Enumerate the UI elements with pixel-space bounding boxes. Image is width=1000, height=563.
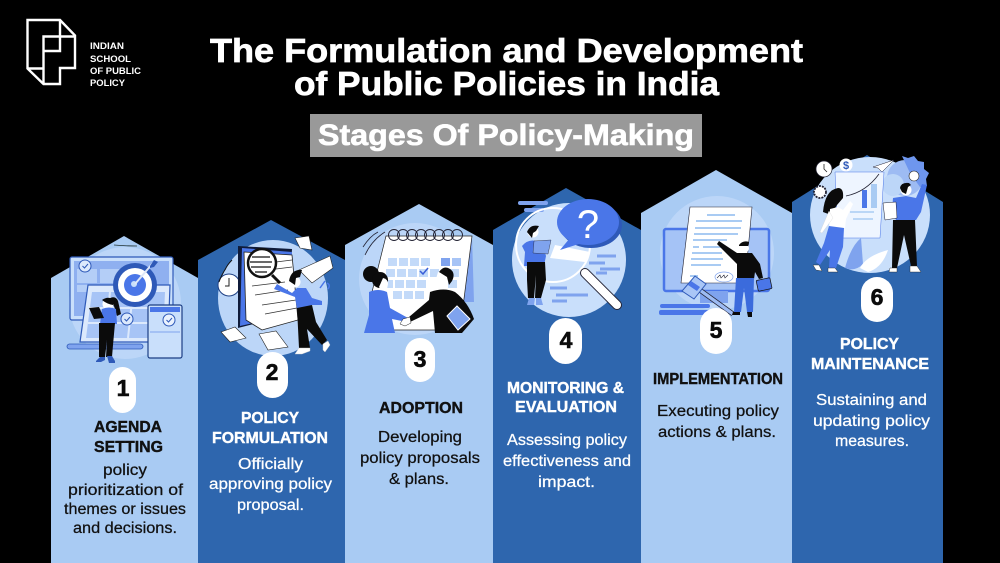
step badge 3 bbox=[405, 338, 435, 382]
subtitle banner bbox=[310, 114, 702, 157]
logo text: POLICY bbox=[90, 78, 126, 89]
description 4: Assessing policy bbox=[507, 432, 627, 449]
step badge 5: 5 bbox=[710, 317, 723, 343]
figure: woman bbox=[363, 266, 408, 333]
icon: calendar bbox=[370, 230, 472, 330]
description 2 bbox=[209, 456, 332, 514]
description 3: & plans. bbox=[389, 471, 449, 488]
step badge 5 bbox=[700, 308, 732, 354]
description 3: Developing bbox=[378, 429, 462, 446]
description 1: prioritization of bbox=[68, 482, 184, 499]
description 1: and decisions. bbox=[73, 520, 177, 537]
panel 3: adoption bbox=[345, 204, 493, 563]
figure: man bbox=[400, 268, 474, 333]
heading: policy formulation: FORMULATION bbox=[212, 430, 328, 447]
description 3: policy proposals bbox=[360, 450, 480, 467]
step badge 4 bbox=[549, 318, 582, 364]
description 5 bbox=[657, 403, 779, 441]
description 6: updating policy bbox=[813, 413, 930, 430]
panel 2: policy formulation bbox=[198, 220, 345, 563]
heading: implementation: IMPLEMENTATION bbox=[653, 371, 783, 388]
logo text bbox=[90, 41, 141, 89]
step badge 6 bbox=[861, 277, 893, 322]
panel 4: monitoring and evaluation bbox=[493, 188, 641, 563]
title: The Formulation and Development bbox=[210, 32, 803, 69]
description 1 bbox=[64, 462, 186, 537]
icon: logo mark bbox=[28, 20, 75, 84]
illustration: target and screens bbox=[67, 245, 182, 363]
figure: man bbox=[883, 183, 927, 272]
illustration: document under magnifier bbox=[218, 236, 333, 356]
description 6: measures. bbox=[835, 433, 909, 450]
title bbox=[210, 32, 803, 102]
heading: monitoring and evaluation bbox=[507, 380, 624, 416]
icon: question speech bubble: ? bbox=[577, 203, 599, 247]
heading: policy formulation: POLICY bbox=[241, 410, 299, 427]
chart card bbox=[835, 172, 888, 272]
figure: person holding magnifier bbox=[274, 270, 330, 354]
icon: magnifier bbox=[248, 249, 280, 283]
subtitle banner: Stages Of Policy-Making bbox=[318, 119, 694, 152]
description 2: approving policy bbox=[209, 476, 332, 493]
figure: businessman bbox=[717, 241, 772, 317]
description 2: proposal. bbox=[237, 497, 304, 514]
description 4 bbox=[503, 432, 631, 491]
heading: adoption: ADOPTION bbox=[379, 400, 463, 417]
title: of Public Policies in India bbox=[294, 65, 720, 102]
panel 1: agenda setting bbox=[51, 236, 198, 563]
heading: agenda setting: AGENDA bbox=[94, 419, 162, 436]
description 6: Sustaining and bbox=[816, 392, 927, 409]
figure: woman bbox=[813, 188, 853, 272]
icon: magnifier bbox=[516, 208, 617, 305]
logo text: INDIAN bbox=[90, 41, 124, 52]
heading: policy formulation bbox=[212, 410, 328, 447]
illustration: calendar and handshake bbox=[359, 223, 474, 335]
icon: signed document bbox=[681, 207, 752, 283]
step badge 6: 6 bbox=[871, 284, 883, 310]
logo text: OF PUBLIC bbox=[90, 66, 141, 77]
description 2: Officially bbox=[238, 456, 303, 473]
step badge 1: 1 bbox=[117, 375, 130, 401]
heading: monitoring and evaluation: EVALUATION bbox=[515, 399, 617, 416]
description 4: impact. bbox=[538, 474, 595, 491]
step badge 2 bbox=[257, 352, 288, 398]
panel 6: policy maintenance bbox=[792, 155, 943, 563]
illustration: chart and two people: $ bbox=[843, 160, 849, 172]
heading: agenda setting: SETTING bbox=[94, 439, 163, 456]
heading: agenda setting bbox=[94, 419, 163, 456]
illustration: document, gavel and person bbox=[659, 196, 774, 317]
heading: monitoring and evaluation: MONITORING & bbox=[507, 380, 624, 397]
illustration: magnifier and question bubble bbox=[512, 199, 626, 317]
description 6 bbox=[813, 392, 930, 450]
figure: woman with tablet bbox=[89, 297, 121, 363]
description 1: policy bbox=[103, 462, 147, 479]
description 5: actions & plans. bbox=[658, 424, 776, 441]
figure: person with tablet bbox=[522, 226, 551, 305]
description 4: effectiveness and bbox=[503, 453, 631, 470]
description 3 bbox=[360, 429, 480, 488]
icon: target bbox=[113, 260, 158, 307]
heading: policy maintenance: MAINTENANCE bbox=[811, 356, 929, 373]
step badge 2: 2 bbox=[266, 359, 278, 385]
description 5: Executing policy bbox=[657, 403, 779, 420]
heading: policy maintenance: POLICY bbox=[840, 336, 899, 353]
step badge 1 bbox=[109, 367, 136, 413]
icon: gavel bbox=[659, 276, 733, 315]
logo: Indian School of Public Policy bbox=[28, 20, 141, 89]
illustration: chart and two people bbox=[810, 156, 930, 273]
panel 5: implementation bbox=[641, 170, 792, 563]
step badge 3: 3 bbox=[414, 346, 426, 372]
description 1: themes or issues bbox=[64, 501, 186, 518]
heading: policy maintenance bbox=[811, 336, 929, 373]
logo text: SCHOOL bbox=[90, 54, 131, 65]
step badge 4: 4 bbox=[560, 327, 573, 353]
